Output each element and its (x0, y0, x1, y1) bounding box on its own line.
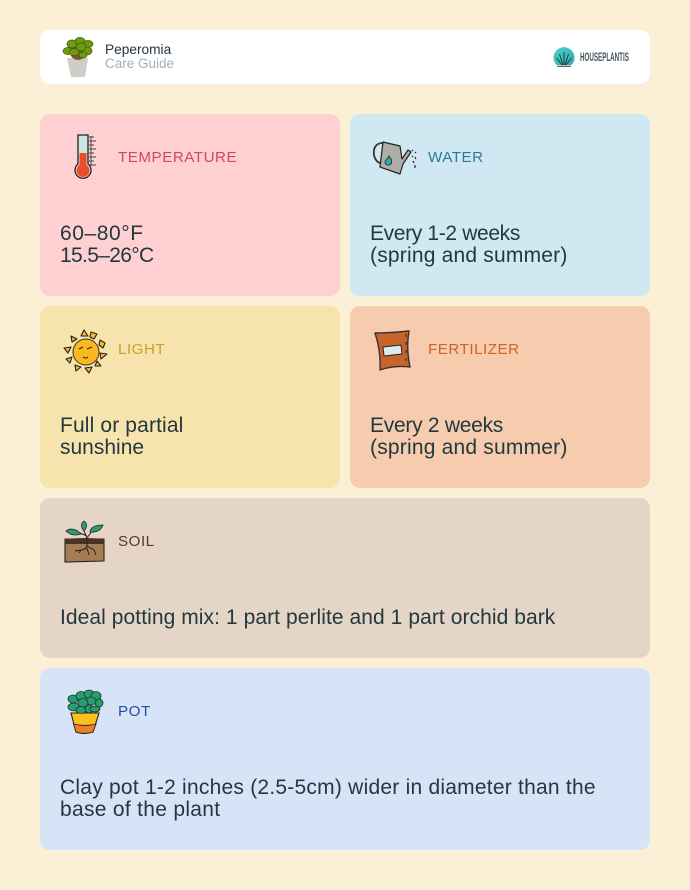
label: FERTILIZER (428, 341, 520, 358)
panel: temperature (40, 114, 340, 296)
panel: light (40, 306, 340, 488)
value: base of the plant (60, 798, 220, 821)
label: POT (118, 703, 151, 720)
logo wordmark: HOUSEPLANTIS (580, 50, 629, 64)
value: (spring and summer) (370, 244, 568, 267)
panel: fertilizer (350, 306, 650, 488)
value: Every 2 weeks (370, 414, 503, 437)
icon: thermometer (74, 134, 96, 179)
value: Every 1-2 weeks (370, 222, 520, 245)
value (60, 222, 154, 267)
header bar (40, 30, 650, 84)
icon: fertilizer bag (374, 330, 411, 371)
label: LIGHT (118, 341, 165, 358)
value: 15.5–26°C (60, 244, 154, 267)
value (60, 776, 596, 821)
value: sunshine (60, 436, 144, 459)
panel: water (350, 114, 650, 296)
label: WATER (428, 149, 484, 166)
panel: soil (40, 498, 650, 658)
icon: soil and sprout (64, 520, 105, 563)
label: TEMPERATURE (118, 149, 237, 166)
icon: peperomia plant (62, 37, 94, 77)
panel: pot (40, 668, 650, 850)
value: Full or partial (60, 414, 183, 437)
label: SOIL (118, 533, 155, 550)
subtitle: Care Guide (105, 56, 174, 71)
value (60, 414, 183, 459)
logo mark (554, 47, 574, 67)
value: (spring and summer) (370, 436, 568, 459)
icon: sun (64, 329, 108, 374)
logo: Houseplantis (554, 47, 629, 67)
title: Peperomia (105, 42, 171, 57)
value (370, 414, 568, 459)
value (370, 222, 568, 267)
value: Ideal potting mix: 1 part perlite and 1 part orchid bark (60, 606, 555, 629)
value: Clay pot 1-2 inches (2.5-5cm) wider in diameter than the (60, 776, 596, 799)
icon: watering can (372, 141, 416, 175)
icon: potted plant (68, 690, 104, 734)
value: 60–80°F (60, 222, 144, 245)
